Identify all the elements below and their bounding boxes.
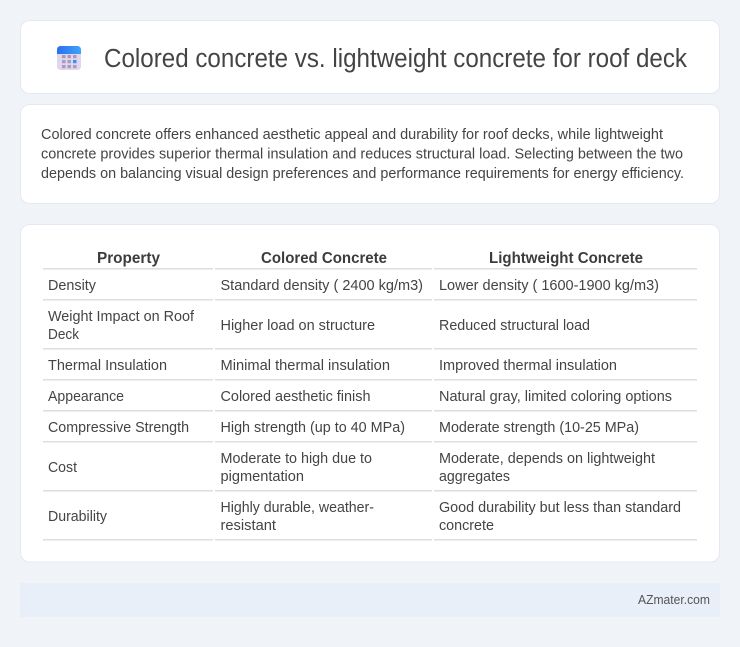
row: density bbox=[48, 278, 659, 294]
row: durability: concrete bbox=[439, 518, 494, 534]
row: cost: Moderate, depends on lightweight bbox=[439, 451, 655, 467]
row: compressive strength: Moderate strength (10-25 MPa) bbox=[439, 420, 639, 436]
row: cost: pigmentation bbox=[220, 469, 304, 485]
row: density: Density bbox=[48, 278, 97, 294]
description text bbox=[41, 126, 684, 182]
row: durability bbox=[48, 500, 681, 534]
description text: concrete provides superior thermal insulation and reduces structural load. Selecting between the two bbox=[41, 146, 683, 162]
panel: comparison table bbox=[20, 224, 720, 562]
row: durability: Good durability but less than standard bbox=[439, 500, 681, 516]
footer credit: AZmater.com bbox=[638, 593, 710, 607]
table header row bbox=[97, 250, 643, 267]
row: thermal insulation: Improved thermal insulation bbox=[439, 358, 617, 374]
row: thermal insulation bbox=[48, 358, 617, 374]
footer bar bbox=[20, 583, 720, 617]
row: compressive strength: Compressive Strength bbox=[48, 420, 189, 436]
table header row: Colored Concrete bbox=[261, 250, 387, 267]
row: durability: Durability bbox=[48, 509, 108, 525]
row: density: Lower density ( 1600-1900 kg/m3) bbox=[439, 278, 659, 294]
row: thermal insulation: Thermal Insulation bbox=[48, 358, 167, 374]
panel: description bbox=[20, 104, 720, 204]
row: durability: Highly durable, weather- bbox=[220, 500, 374, 516]
row: weight impact bbox=[48, 309, 590, 343]
row: weight impact: Weight Impact on Roof bbox=[48, 309, 195, 325]
row: weight impact: Higher load on structure bbox=[220, 318, 375, 334]
icon: calendar bbox=[57, 46, 81, 70]
row: thermal insulation: Minimal thermal insulation bbox=[220, 358, 390, 374]
row: cost: Moderate to high due to bbox=[220, 451, 372, 467]
description text: Colored concrete offers enhanced aesthetic appeal and durability for roof decks, while lightweight bbox=[41, 126, 664, 143]
row: weight impact: Reduced structural load bbox=[439, 318, 590, 334]
row: appearance: Natural gray, limited coloring options bbox=[439, 389, 672, 405]
row: durability: resistant bbox=[220, 518, 276, 534]
row: appearance: Appearance bbox=[48, 389, 124, 405]
header panel bbox=[20, 20, 720, 94]
title: Colored concrete vs. lightweight concrete for roof deck bbox=[104, 45, 687, 73]
row: cost: Cost bbox=[48, 460, 77, 476]
row: cost bbox=[48, 451, 655, 485]
row: appearance: Colored aesthetic finish bbox=[220, 389, 370, 405]
row: appearance bbox=[48, 389, 672, 405]
row: density: Standard density ( 2400 kg/m3) bbox=[220, 278, 423, 294]
row: weight impact: Deck bbox=[48, 327, 80, 343]
table header row: Lightweight Concrete bbox=[489, 250, 643, 267]
description text: depends on balancing visual design preferences and performance requirements for energy efficiency. bbox=[41, 165, 684, 182]
row: compressive strength bbox=[48, 420, 639, 436]
row: compressive strength: High strength (up to 40 MPa) bbox=[220, 420, 405, 436]
row: cost: aggregates bbox=[439, 469, 510, 485]
table header row: Property bbox=[97, 250, 160, 267]
